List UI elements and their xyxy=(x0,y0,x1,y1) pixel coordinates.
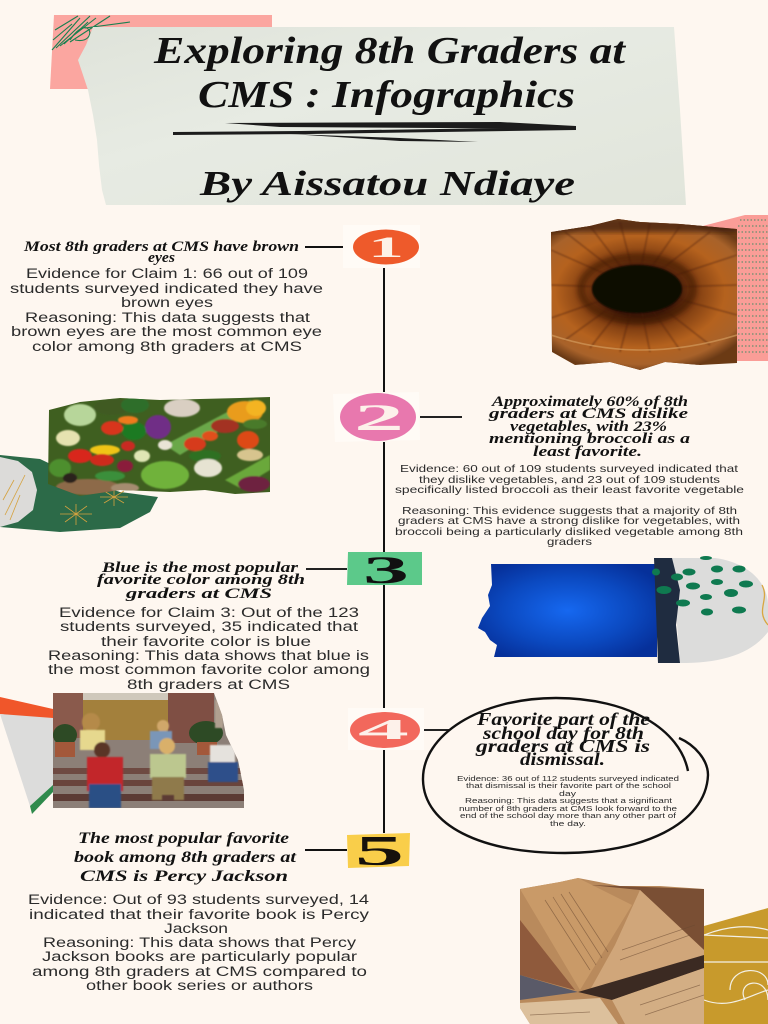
badge 4 xyxy=(348,708,424,750)
evidence 4 xyxy=(457,774,679,828)
evidence 1: color among 8th graders at CMS xyxy=(32,339,302,354)
item 1 xyxy=(10,210,768,374)
evidence 2 xyxy=(395,464,744,548)
claim 2: Approximately 60% of 8th xyxy=(491,394,688,410)
title xyxy=(153,30,627,116)
evidence 5: Jackson xyxy=(164,921,228,936)
claim 3 xyxy=(97,560,305,602)
evidence 1: brown eyes are the most common eye xyxy=(11,324,322,339)
connector 1 xyxy=(305,246,343,248)
claim 5: book among 8th graders at xyxy=(74,849,297,866)
item 5 xyxy=(28,829,768,1024)
claim 5: CMS is Percy Jackson xyxy=(80,868,288,885)
claim 2: least favorite. xyxy=(533,444,642,460)
badge 4: 4 xyxy=(358,714,409,746)
evidence 4: the day. xyxy=(550,819,586,828)
title: CMS : Infographics xyxy=(198,74,575,116)
timeline spine xyxy=(383,268,385,833)
evidence 1: brown eyes xyxy=(121,295,213,310)
claim 2: mentioning broccoli as a xyxy=(489,431,691,447)
evidence 4: day xyxy=(559,789,576,798)
badge 1: 1 xyxy=(368,231,404,264)
evidence 2: they dislike vegetables, and 23 out of 109 students xyxy=(419,475,720,486)
badge 3 xyxy=(347,549,422,592)
badge 2: 2 xyxy=(354,398,404,439)
evidence 3: Evidence for Claim 3: Out of the 123 xyxy=(59,605,359,620)
badge 3: 3 xyxy=(363,549,409,592)
claim 1: eyes xyxy=(148,250,175,266)
evidence 2: broccoli being a particularly disliked vegetable among 8th xyxy=(395,527,743,538)
claim 2: vegetables, with 23% xyxy=(510,419,667,435)
green collage blob xyxy=(0,455,158,532)
connector 4 xyxy=(424,729,449,731)
claim 3: favorite color among 8th xyxy=(97,572,305,588)
blue swatch xyxy=(478,564,657,657)
students photo xyxy=(53,693,245,809)
evidence 5: other book series or authors xyxy=(86,978,313,993)
evidence 1 xyxy=(10,266,323,354)
author: By Aissatou Ndiaye xyxy=(199,164,575,203)
badge 5 xyxy=(347,829,410,875)
claim 4: Favorite part of the xyxy=(476,709,650,729)
green scribble xyxy=(52,16,130,50)
evidence 2: Reasoning: This evidence suggests that a majority of 8th xyxy=(402,506,737,517)
evidence 4: end of the school day more than any other part of xyxy=(460,811,677,820)
claim 4: dismissal. xyxy=(520,749,605,769)
orange and grey collage xyxy=(0,697,53,814)
brush stroke underline xyxy=(173,122,576,142)
item 2 xyxy=(0,392,744,548)
evidence 5 xyxy=(28,892,370,993)
badge 5: 5 xyxy=(355,829,404,875)
badge 2 xyxy=(333,392,420,442)
badge 1 xyxy=(343,225,420,268)
claim 3: graders at CMS xyxy=(125,586,272,602)
patterned collage shape xyxy=(652,556,768,663)
evidence 1: Reasoning: This data suggests that xyxy=(25,310,310,325)
evidence 4: Evidence: 36 out of 112 students surveyed indicated xyxy=(457,774,679,783)
evidence 5: Reasoning: This data shows that Percy xyxy=(43,935,356,950)
evidence 3 xyxy=(48,605,370,692)
hand drawn circle xyxy=(423,698,708,853)
pupil xyxy=(592,265,682,313)
pink speckled paper xyxy=(695,215,768,361)
title: Exploring 8th Graders at xyxy=(153,30,627,72)
vegetables photo xyxy=(48,396,271,497)
item 3 xyxy=(48,549,768,692)
pink paper behind title xyxy=(50,15,272,89)
evidence 4: that dismissal is their favorite part of the school xyxy=(466,781,671,790)
open books photo xyxy=(520,876,704,1024)
evidence 3: Reasoning: This data shows that blue is xyxy=(48,648,369,663)
mustard collage shape xyxy=(590,908,768,1024)
evidence 3: their favorite color is blue xyxy=(101,634,311,649)
title banner collage xyxy=(50,15,686,205)
connector 3 xyxy=(306,568,347,570)
claim 4: school day for 8th xyxy=(482,723,644,743)
evidence 2: graders at CMS have a strong dislike for vegetables, with xyxy=(398,516,740,527)
claim 2 xyxy=(488,394,691,460)
claim 2: graders at CMS dislike xyxy=(488,406,688,422)
claim 5: The most popular favorite xyxy=(78,830,289,847)
connector 5 xyxy=(305,849,347,851)
evidence 2: graders xyxy=(547,537,592,548)
claim 4: graders at CMS is xyxy=(475,736,650,756)
evidence 5: Jackson books are particularly popular xyxy=(42,949,358,964)
claim 4 xyxy=(475,709,650,769)
evidence 1: Evidence for Claim 1: 66 out of 109 xyxy=(26,266,308,281)
evidence 3: the most common favorite color among xyxy=(48,662,370,677)
evidence 4: number of 8th graders at CMS look forward to the xyxy=(459,804,677,813)
evidence 5: indicated that their favorite book is Percy xyxy=(29,907,369,922)
evidence 2: Evidence: 60 out of 109 students surveyed indicated that xyxy=(400,464,738,475)
claim 5 xyxy=(74,830,297,885)
claim 1 xyxy=(23,239,299,266)
connector 2 xyxy=(420,416,462,418)
claim 3: Blue is the most popular xyxy=(101,560,298,576)
evidence 2: specifically listed broccoli as their least favorite vegetable xyxy=(395,485,744,496)
evidence 3: 8th graders at CMS xyxy=(127,677,290,692)
evidence 1: students surveyed indicated they have xyxy=(10,281,323,296)
claim 1: Most 8th graders at CMS have brown xyxy=(23,239,299,255)
item 4 xyxy=(0,693,708,853)
torn title paper xyxy=(78,27,686,205)
evidence 4: Reasoning: This data suggests that a significant xyxy=(465,796,673,805)
evidence 3: students surveyed, 35 indicated that xyxy=(60,619,358,634)
evidence 5: Evidence: Out of 93 students surveyed, 14 xyxy=(28,892,370,907)
evidence 5: among 8th graders at CMS compared to xyxy=(32,964,367,979)
eye photo xyxy=(551,219,737,370)
